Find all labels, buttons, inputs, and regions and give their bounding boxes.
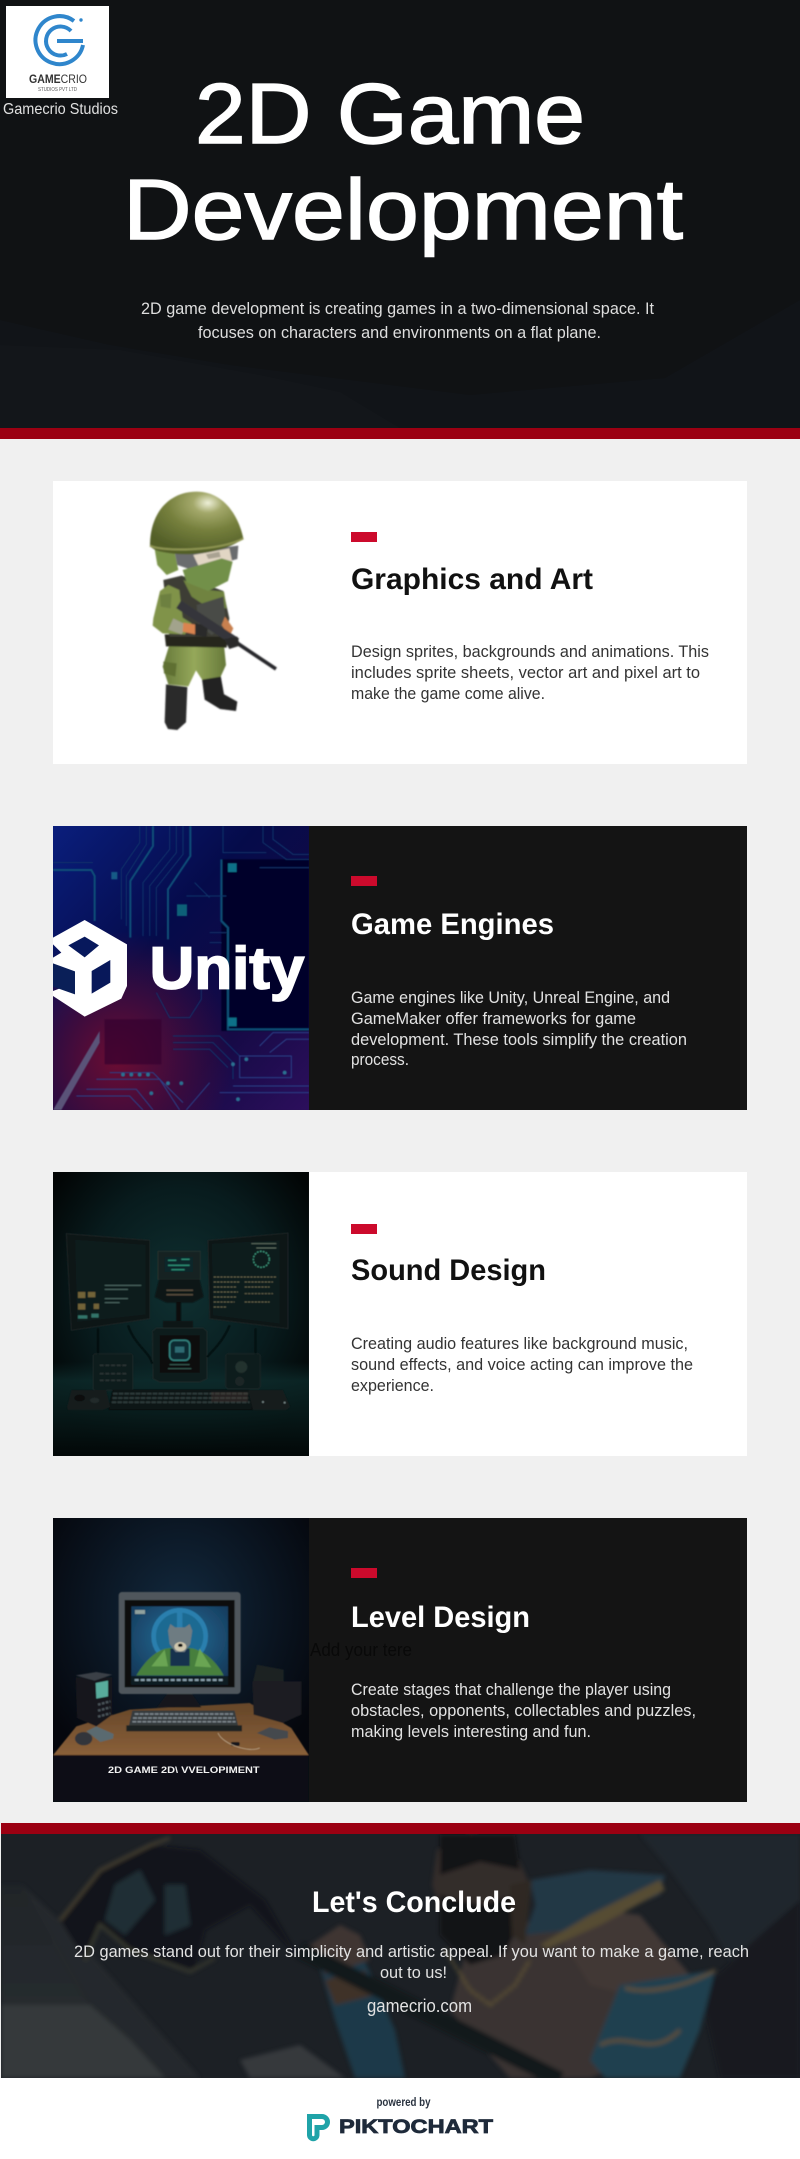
body text: includes sprite sheets, vector art and pixel art to <box>351 663 700 682</box>
desk <box>53 1703 309 1755</box>
intro text: 2D game development is creating games in a two-dimensional space. It <box>141 299 654 318</box>
warrior body <box>449 1930 618 2078</box>
image: Unity logo on circuit board <box>53 826 309 1110</box>
heading: Game Engines <box>351 908 554 941</box>
gold chain <box>445 1950 530 2005</box>
body text: development. These tools simplify the creation <box>351 1030 687 1049</box>
image: desktop computer with game on screen <box>53 1518 309 1802</box>
warrior cape <box>525 1870 665 1935</box>
accent bar <box>351 1568 377 1578</box>
keyboard <box>126 1711 242 1731</box>
body text: experience. <box>351 1376 434 1395</box>
hand on shaft <box>310 1925 370 1975</box>
body text: Design sprites, backgrounds and animations. This <box>351 642 709 661</box>
body text: Create stages that challenge the player using <box>351 1680 671 1699</box>
body text: sound effects, and voice acting can improve the <box>351 1355 693 1374</box>
body text <box>351 1334 693 1395</box>
warrior bracers <box>318 1950 405 2078</box>
footer: powered by Piktochart <box>0 2078 800 2159</box>
logo strapline: STUDIOS PVT LTD <box>38 87 77 93</box>
panel: game engines <box>53 826 747 1110</box>
panel: sound design <box>53 1172 747 1456</box>
heading: Level Design <box>351 1601 530 1634</box>
closing text: out to us! <box>380 1963 447 1982</box>
panel: level design <box>53 1518 747 1802</box>
closing text: 2D games stand out for their simplicity and artistic appeal. If you want to make a game, reach <box>74 1942 749 1961</box>
body text: Game engines like Unity, Unreal Engine, and <box>351 988 670 1007</box>
panel: conclusion <box>1 1823 800 2080</box>
body text: obstacles, opponents, collectables and puzzles, <box>351 1701 696 1720</box>
title: 2D Game <box>195 67 585 162</box>
heading: Sound Design <box>351 1254 546 1287</box>
monitor stand <box>157 1693 201 1707</box>
weapon shaft <box>300 1950 560 2080</box>
Piktochart wordmark: PIKTOCHART <box>339 2116 493 2138</box>
title: Development <box>123 163 683 258</box>
speakers <box>93 1325 260 1390</box>
logo wordmark: GAMECRIO <box>29 74 87 86</box>
icon: soldier character <box>150 492 276 730</box>
left monitor <box>66 1234 150 1330</box>
box at right <box>252 1665 301 1723</box>
powered by label: powered by <box>376 2097 431 2109</box>
image: dimmed warrior artwork <box>1 1834 718 2078</box>
body text: making levels interesting and fun. <box>351 1722 591 1741</box>
body text: GameMaker offer frameworks for game <box>351 1009 636 1028</box>
image: dark audio workstation <box>53 1172 309 1456</box>
warrior head and beard <box>432 1834 528 1908</box>
intro text: focuses on characters and environments on a flat plane. <box>198 323 601 342</box>
right monitor <box>208 1233 288 1329</box>
keyboard <box>67 1390 290 1410</box>
center devices <box>155 1251 204 1328</box>
logo <box>6 6 109 98</box>
body text: make the game come alive. <box>351 684 545 703</box>
panel: graphics and art <box>53 481 747 764</box>
body text: Creating audio features like background music, <box>351 1334 688 1353</box>
title <box>123 67 683 258</box>
accent bar <box>351 532 377 542</box>
body text: process. <box>351 1050 409 1069</box>
heading: Graphics and Art <box>351 563 593 596</box>
axe head <box>60 1845 300 1970</box>
intro text <box>141 299 654 342</box>
central box <box>152 1328 207 1382</box>
accent bar <box>351 1224 377 1234</box>
logo caption: Gamecrio Studios <box>3 101 118 118</box>
closing text <box>74 1942 749 1982</box>
mouse and controller <box>75 1726 288 1749</box>
small computer <box>76 1672 112 1726</box>
icon: Piktochart mark <box>310 2116 328 2139</box>
Unity wordmark: Unity <box>150 935 304 1002</box>
stray placeholder text: Add your tere <box>310 1640 412 1660</box>
hero panel <box>0 0 800 439</box>
body text <box>351 642 709 703</box>
accent bar <box>351 876 377 886</box>
website: gamecrio.com <box>367 1996 472 2016</box>
monitor <box>119 1592 241 1694</box>
icon: Gamecrio G mark <box>36 16 83 64</box>
icon: Unity cube <box>53 920 127 1017</box>
heading: Let's Conclude <box>312 1886 516 1919</box>
body text <box>351 1680 696 1741</box>
image caption: 2D GAME 2D\ VVELOPIMENT <box>108 1765 260 1775</box>
red band under hero <box>0 428 800 439</box>
red band above conclusion <box>1 1823 800 1834</box>
body text <box>351 988 687 1069</box>
